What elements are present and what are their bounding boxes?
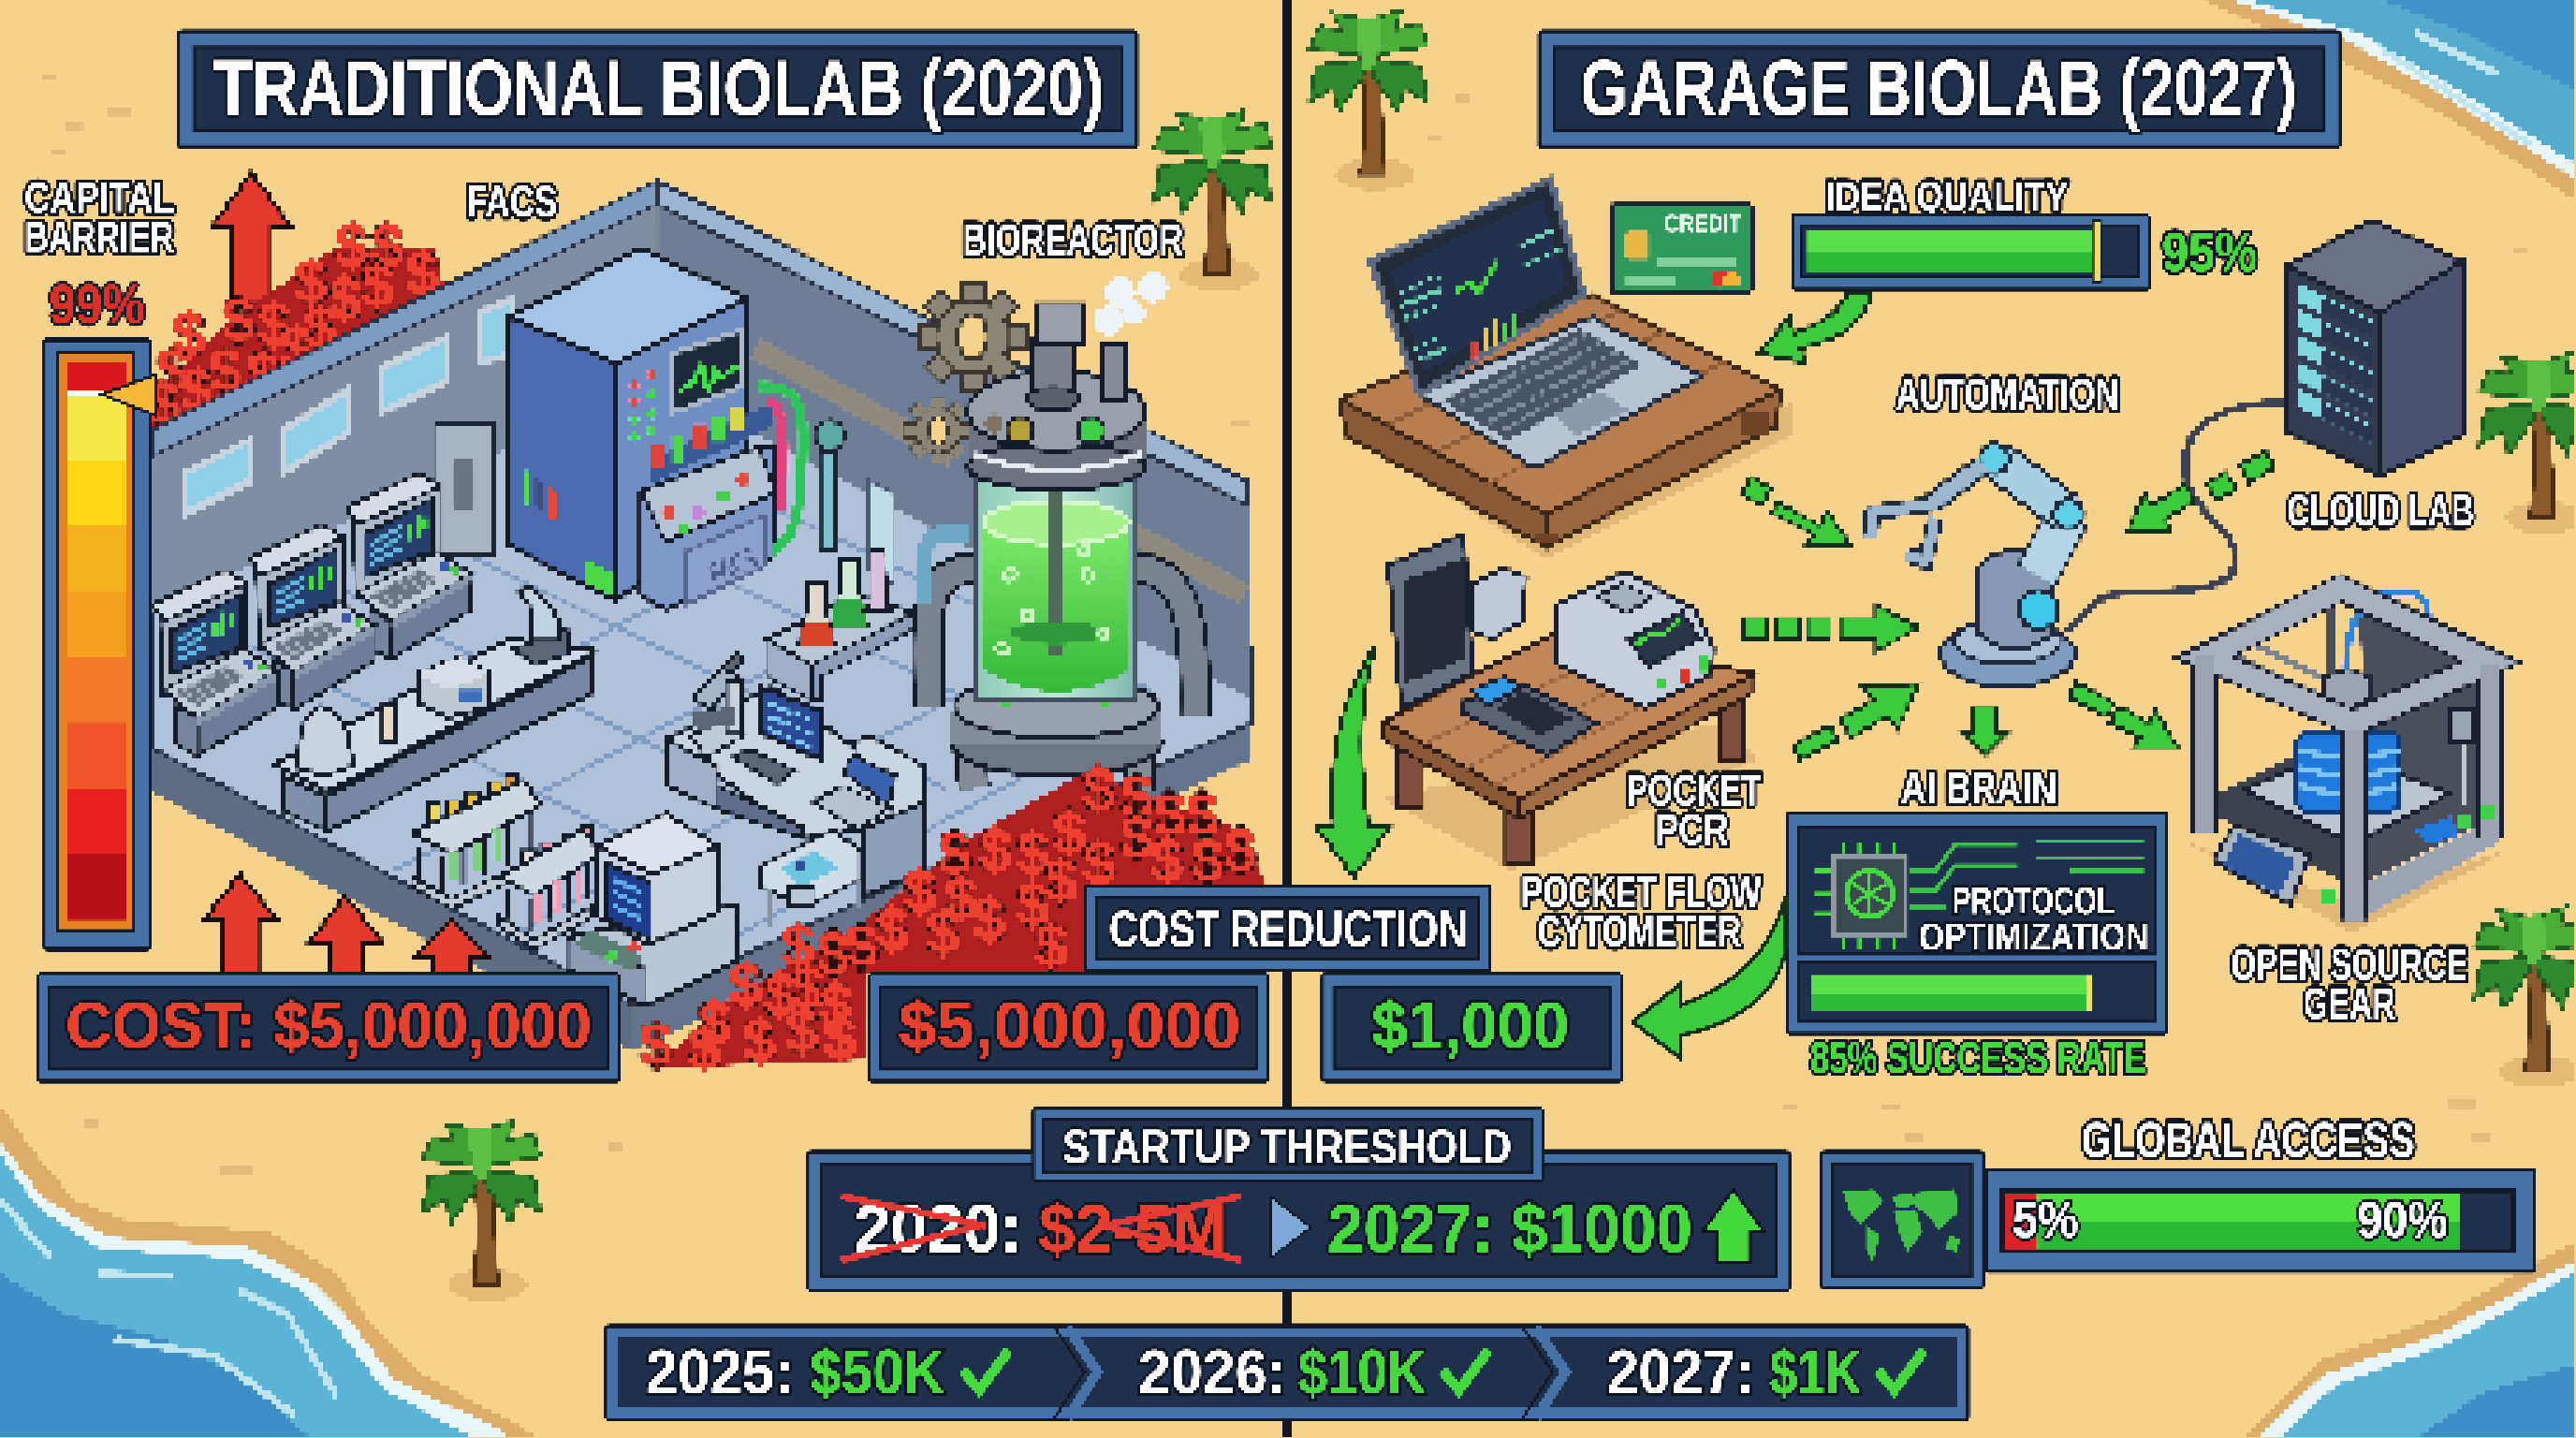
global access bar: [1984, 1168, 2537, 1273]
label: automation: AUTOMATION: [1895, 370, 2119, 419]
dollar pile: upper left: $: [294, 247, 328, 315]
pocket flow cytometer device: [1460, 677, 1597, 756]
blue filament print: [2297, 731, 2400, 812]
dollar pile: lower right: $: [1223, 815, 1257, 884]
panel: startup threshold: [807, 1108, 1791, 1291]
dollar pile: upper left: $: [155, 336, 189, 404]
dollar pile: lower right: $: [1082, 755, 1116, 823]
dollar pile: upper left: $: [371, 211, 404, 279]
dollar pile: lower right: $: [816, 919, 850, 988]
threshold tab: STARTUP THRESHOLD: [1063, 1121, 1512, 1174]
dollar pile: upper left: $: [257, 290, 291, 359]
dollar pile: lower right: $: [973, 885, 1006, 953]
dollar pile: lower right: $: [944, 863, 978, 932]
dollar pile: lower right: $: [742, 1006, 776, 1075]
label: AI brain: AI BRAIN: [1901, 764, 2056, 814]
arrow: capital barrier up: [212, 172, 291, 304]
dollar pile: lower right: $: [823, 1003, 856, 1071]
label: 85% success rate: 85% SUCCESS RATE: [1810, 1034, 2145, 1083]
computer consoles: [153, 473, 472, 756]
panel: $1,000: $1,000: [1372, 989, 1569, 1063]
dollar pile: upper left: $: [279, 313, 313, 381]
label: 99%: 99%: [50, 273, 145, 336]
dollar pile: lower right: $: [903, 857, 937, 925]
printer back panels: [2213, 603, 2498, 923]
dollar pile: lower right: $: [1153, 780, 1187, 848]
palm trees: [422, 10, 2576, 1301]
label: idea quality: IDEA QUALITY: [1825, 174, 2069, 220]
wall pipe: [755, 348, 1245, 594]
dollar pile: lower right: $: [1053, 798, 1087, 866]
dollar pile: upper left: $: [329, 263, 362, 331]
flask bench: [768, 550, 929, 700]
arrow: laptop to automation: [1741, 477, 1850, 544]
ocean: bottom left: [0, 1104, 542, 1438]
far bench scope: [514, 585, 568, 666]
panel: $5,000,000: [868, 973, 1270, 1083]
arrow: pcr to automation: [1743, 605, 1919, 651]
dollar pile: lower right: $: [1149, 826, 1183, 894]
dashed green arrows: [1741, 450, 2275, 760]
timeline 2026: 2026:: [1138, 1338, 1286, 1407]
small analyzer device: [761, 829, 861, 929]
ocean: top right: [2202, 0, 2576, 200]
laptop on wooden desk: [1340, 179, 1791, 559]
label: pocket PCR: POCKET: [1627, 766, 1761, 815]
dollar pile: lower right: $: [638, 1009, 672, 1078]
dollar pile: lower right: $: [819, 970, 853, 1038]
dollar pile: upper left: $: [303, 293, 337, 361]
label: bioreactor: BIOREACTOR: [963, 215, 1183, 265]
dollar pile: upper left: $: [246, 339, 280, 407]
label: pocket PCR: PCR: [1656, 805, 1728, 855]
reactor base: [951, 675, 1162, 775]
icon: world map panel: [1821, 1151, 1984, 1290]
panel: AI brain protocol optimization: OPTIMIZATION: [1919, 915, 2149, 958]
icon: up arrow: [1702, 1190, 1764, 1262]
center divider: [1283, 0, 1293, 1438]
smartphone standing: [1388, 534, 1526, 708]
label: cloud lab: CLOUD LAB: [2287, 487, 2474, 536]
icon: credit card: [1612, 204, 1751, 294]
title: garage biolab: [1538, 30, 2341, 150]
dollar pile: lower right: [638, 755, 1268, 1081]
dollar pile: upper left: $: [405, 239, 439, 307]
panel: AI brain protocol optimization: PROTOCOL: [1952, 879, 2115, 922]
dollar pile: upper left: $: [181, 356, 214, 424]
laptop screen: [1370, 179, 1584, 394]
laptop base: [1419, 317, 1702, 468]
label: pocket PCR: [1627, 766, 1761, 855]
arrow: automation to ai brain: [1960, 707, 2009, 756]
arrow: big green down: [1316, 644, 1390, 877]
dollar pile: upper left: $: [335, 211, 369, 279]
timeline bar: [605, 1325, 1969, 1421]
timeline 2025: $50K: [810, 1338, 944, 1407]
timeline 2025: [646, 1338, 1009, 1407]
printer frame: [2204, 588, 2491, 920]
front lab bench: [274, 585, 596, 831]
dollar pile: lower right: $: [1120, 761, 1154, 829]
global access bar: 90%: [2358, 1192, 2448, 1249]
dollar pile: lower right: $: [729, 950, 763, 1019]
threshold arrow: [1270, 1196, 1311, 1258]
dollar pile: lower right: $: [875, 894, 909, 962]
center desk with microscope and monitors: [667, 653, 923, 895]
threshold 2020 value: $2-5M: [1038, 1189, 1227, 1267]
dollar pile: lower right: $: [938, 819, 972, 888]
cable: [2067, 403, 2285, 633]
benchtop computer: [567, 814, 736, 1005]
dollar pile: lower right: $: [926, 898, 959, 966]
FACS machine: FACS: [705, 543, 762, 590]
3D printer: [2185, 588, 2517, 933]
panel: $1,000: [1321, 973, 1623, 1083]
dollar pile: lower right: $: [1034, 911, 1068, 979]
glass vessel and green liquid: [976, 468, 1137, 698]
dollar pile: lower right: $: [1120, 802, 1154, 871]
timeline 2026: $10K: [1298, 1338, 1426, 1407]
panel: cost total: COST: $5,000,000: [66, 989, 592, 1063]
panel: cost total: [37, 973, 621, 1083]
title: traditional biolab: TRADITIONAL BIOLAB (2020): [213, 44, 1104, 132]
dollar pile: lower right: $: [688, 1013, 722, 1081]
threshold 2020 value: 2020:: [855, 1189, 1022, 1267]
chip with brain: [1815, 843, 1906, 949]
panel: cost reduction: [1084, 884, 1492, 973]
label: FACS: FACS: [466, 178, 557, 227]
timeline 2027: 2027:: [1606, 1338, 1754, 1407]
robotic arm: [1869, 444, 2083, 687]
printer shadow: [2185, 842, 2517, 933]
dollar pile: lower right: $: [1191, 826, 1224, 894]
bench microscope: [299, 703, 396, 775]
dollar pile: upper left: $: [208, 336, 242, 404]
right wall: [657, 181, 1249, 698]
print head and filament: [2346, 594, 2428, 670]
laptop keyboard: [1442, 329, 1643, 440]
dollar pile: lower right: $: [1017, 819, 1050, 888]
table legs: [1397, 698, 1745, 864]
rack one: [413, 774, 540, 909]
dollar pile: lower right: $: [697, 988, 732, 1056]
desk shadow: [1364, 403, 1791, 559]
idea quality bar: [1791, 213, 2150, 291]
dollar pile: lower right: $: [1186, 780, 1220, 848]
label: pocket flow cytometer: POCKET FLOW: [1521, 868, 1762, 917]
arrows: rising costs: [204, 874, 488, 977]
bioreactor pipes: [928, 566, 1194, 788]
arrow: idea quality to laptop: [1760, 292, 1871, 363]
label: 95%: 95%: [2162, 221, 2257, 284]
bioreactor: [923, 272, 1194, 788]
dollar pile: lower right: $: [784, 996, 819, 1064]
arrow: AI panel to $1,000: [1633, 897, 1786, 1058]
panel: AI brain protocol optimization: [1786, 812, 2169, 1035]
dollar pile: lower right: $: [1045, 845, 1078, 914]
dollar pile: lower right: $: [764, 961, 798, 1029]
printer bed: [2244, 749, 2450, 836]
threshold 2020 value: [842, 1189, 1240, 1267]
label: open source gear: [2231, 940, 2467, 1029]
timeline 2027: [1606, 1338, 1924, 1407]
dollar pile: lower right: $: [844, 911, 878, 979]
label: open source gear: OPEN SOURCE: [2231, 940, 2467, 990]
dollar pile: lower right: $: [782, 911, 815, 979]
title: garage biolab: GARAGE BIOLAB (2027): [1580, 44, 2297, 132]
dollar pile: lower right: $: [1017, 870, 1050, 938]
cloud lab server: [2285, 220, 2463, 477]
dollar pile: upper left: [148, 211, 446, 460]
rack two: [500, 827, 601, 949]
PCR machine: [1558, 572, 1714, 708]
arrow: automation to 3d printer: [2069, 682, 2178, 749]
dollar pile: upper left: $: [172, 300, 206, 368]
timeline 2026: [1138, 1338, 1488, 1407]
steam: [1094, 272, 1168, 335]
left wall: [152, 181, 657, 611]
pocket PCR table setup: [1383, 534, 1758, 871]
label: global access: GLOBAL ACCESS: [2082, 1113, 2415, 1168]
lab floor: [152, 345, 1251, 1051]
table shadow: [1383, 723, 1758, 871]
test tube racks: [413, 774, 601, 949]
label: capital barrier: BARRIER: [24, 213, 174, 261]
label: capital barrier: CAPITAL: [24, 173, 174, 221]
reactor lid: [968, 304, 1147, 490]
threshold tab: [1032, 1108, 1544, 1183]
dollar pile: lower right: $: [791, 954, 826, 1022]
FACS machine: [509, 248, 803, 609]
threshold 2027 value: 2027: $1000: [1327, 1189, 1692, 1267]
arrow: cloud lab to automation: [2128, 450, 2275, 533]
label: pocket flow cytometer: CYTOMETER: [1538, 907, 1741, 957]
panel: $5,000,000: $5,000,000: [899, 989, 1240, 1063]
dollar pile: lower right: $: [1082, 829, 1116, 897]
dollar pile: upper left: $: [361, 250, 395, 318]
dollar pile: upper left: $: [221, 285, 256, 353]
isometric traditional lab: [152, 181, 1251, 1051]
title: traditional biolab: [178, 30, 1138, 150]
printer control panel: [2213, 825, 2310, 905]
bench centrifuge box: [417, 657, 490, 718]
timeline 2025: 2025:: [646, 1338, 794, 1407]
arrow: ai brain to automation: [1793, 683, 1919, 760]
label: pocket flow cytometer: [1521, 868, 1762, 957]
wall instruments: [435, 420, 894, 583]
label: capital barrier: [24, 173, 174, 261]
panel: cost reduction: COST REDUCTION: [1109, 901, 1467, 958]
ocean: bottom right: [2241, 1240, 2576, 1438]
sand specks: [41, 74, 2528, 1175]
desk laptop: [813, 736, 923, 829]
table top: [1383, 633, 1754, 818]
printer side electronics: [2415, 710, 2494, 844]
dollar pile: lower right: $: [979, 815, 1013, 884]
wooden desk: [1340, 294, 1781, 547]
global access bar: 5%: [2012, 1192, 2078, 1249]
desk monitor: [733, 687, 823, 784]
label: open source gear: GEAR: [2304, 979, 2395, 1029]
desk microscope: [690, 653, 746, 757]
label: credit: CREDIT: [1664, 209, 1741, 237]
gears: [904, 283, 1027, 464]
dollar pile: upper left: $: [148, 369, 182, 437]
capital barrier thermometer: [43, 337, 156, 951]
timeline 2027: $1K: [1769, 1338, 1862, 1407]
